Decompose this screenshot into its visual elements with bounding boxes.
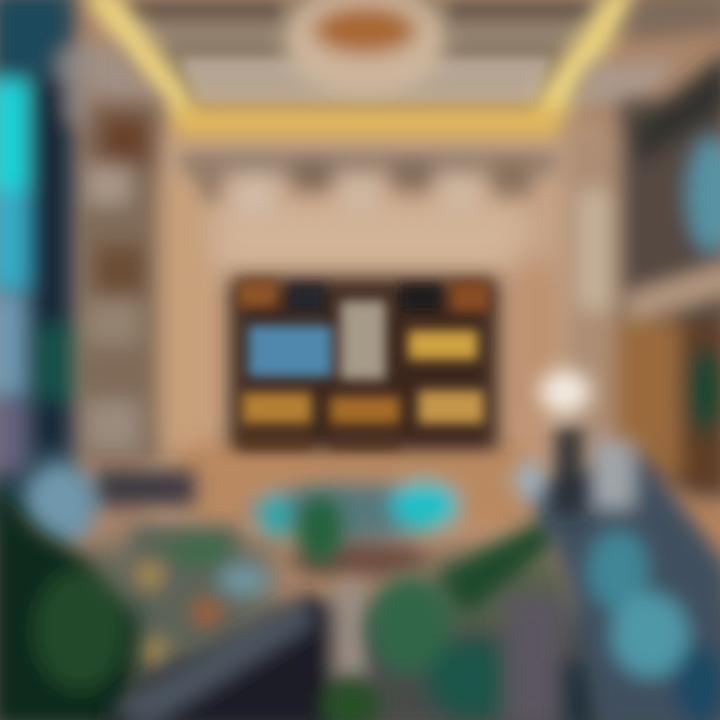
wall pelmet drapes bbox=[180, 150, 560, 215]
ceiling bbox=[110, 0, 640, 115]
left bookcase bbox=[80, 100, 198, 460]
floor lamp bbox=[539, 370, 591, 515]
foreground plants centre bbox=[320, 510, 600, 720]
shelf contents bbox=[238, 280, 490, 450]
foreground left window and furniture bbox=[24, 463, 271, 667]
floor and rug bbox=[190, 460, 530, 578]
central shelving unit bbox=[230, 278, 498, 452]
foreground dark railing bbox=[100, 580, 367, 720]
right side architecture bbox=[565, 50, 720, 560]
left window and column bbox=[0, 0, 85, 520]
ceiling medallion bbox=[283, 0, 447, 96]
foreground plants left bbox=[0, 480, 342, 720]
upper corner ceiling panels bbox=[65, 0, 720, 110]
dark foreground backdrop bbox=[90, 545, 720, 720]
ceiling gold band bbox=[80, 0, 645, 136]
foreground right seating bbox=[514, 440, 720, 720]
back wall bbox=[150, 130, 600, 530]
